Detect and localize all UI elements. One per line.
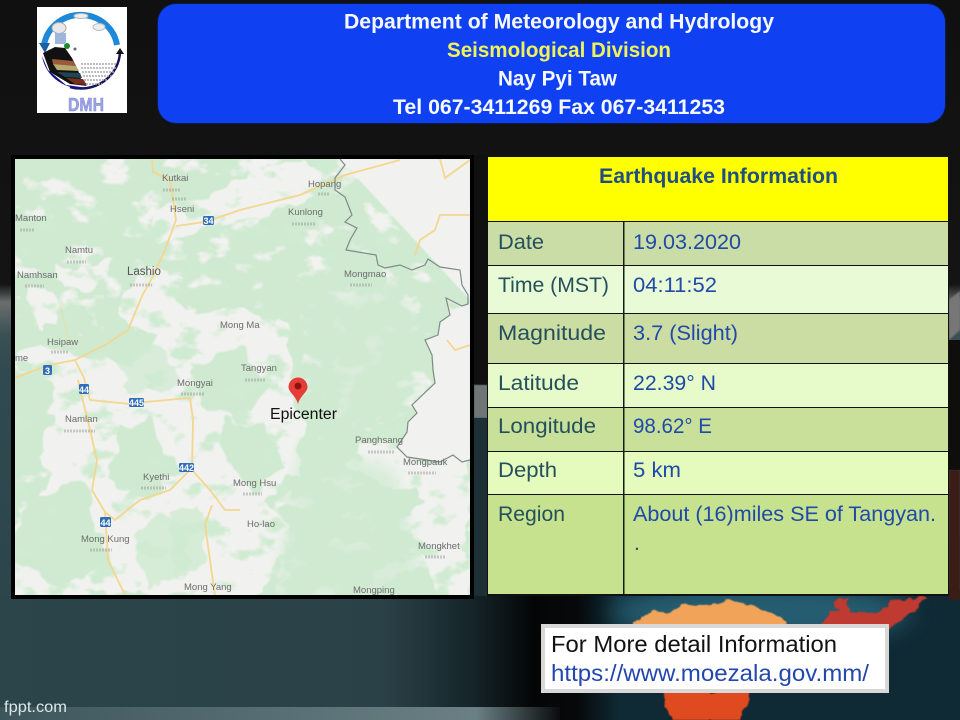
- row: date: [488, 222, 948, 265]
- map: place labels: Mong Kung: [81, 534, 130, 545]
- panel: earthquake information table: [487, 156, 949, 596]
- icon: sea and clouds: [52, 14, 117, 84]
- map: place labels: Lashio: [127, 266, 161, 278]
- map: place labels: Namlan: [65, 414, 98, 425]
- map: place labels: Ho-lao: [247, 519, 275, 530]
- map: place labels: Mongkhet: [418, 541, 460, 552]
- row: depth: [488, 452, 948, 494]
- row: longitude: [488, 408, 948, 451]
- map: route shields: 445: [129, 398, 144, 408]
- callout text: For More detail Information: [551, 631, 837, 657]
- template credit: fppt.com: [4, 699, 67, 716]
- header: contact numbers: Tel 067-3411269 Fax 067-3411253: [393, 96, 725, 119]
- row: latitude: Latitude: [498, 372, 579, 395]
- header: city: Nay Pyi Taw: [498, 68, 618, 90]
- map: place labels: [15, 173, 460, 596]
- map: place labels: Hopang: [308, 179, 341, 190]
- map: place labels: Tangyan: [241, 363, 277, 374]
- table header: Earthquake Information: [599, 165, 838, 188]
- map: forest core: [276, 292, 422, 595]
- header: division: Seismological Division: [447, 39, 671, 62]
- map: route shields: [43, 216, 214, 528]
- map: route shields: 44: [100, 518, 111, 528]
- row: longitude: 98.62° E: [633, 415, 712, 438]
- map: place labels: Mong Ma: [220, 320, 260, 331]
- header panel: [157, 3, 946, 124]
- row: depth: Depth: [498, 459, 557, 482]
- map: place labels: Namhsan: [17, 270, 58, 281]
- map: roads: [15, 159, 470, 595]
- table header: [488, 157, 948, 221]
- earth graphic: continents: [610, 582, 925, 720]
- row: time: 04:11:52: [633, 274, 717, 297]
- row: date: Date: [498, 231, 544, 254]
- epicenter label: Epicenter: [270, 406, 337, 423]
- map: place labels: Kutkai: [162, 173, 188, 184]
- map: place labels: Kyethi: [143, 472, 169, 483]
- map: place labels: Mongyai: [177, 378, 213, 389]
- map: town script marks: [20, 190, 446, 557]
- map: international border: [335, 159, 470, 462]
- map: place labels: Manton: [15, 213, 47, 224]
- map: green patches: [15, 350, 285, 590]
- logo: [37, 7, 127, 115]
- icon: water cycle arrows: [39, 15, 124, 89]
- header: department name: Department of Meteorology and Hydrology: [344, 10, 774, 34]
- row: time: Time (MST): [498, 274, 609, 297]
- panel: map: [11, 155, 474, 600]
- map: place labels: Kunlong: [288, 207, 323, 218]
- logo text: DMH: [68, 95, 104, 115]
- icon: epicenter pin: [288, 377, 308, 404]
- map: place labels: Mong Yang: [184, 582, 232, 593]
- row: region: [488, 495, 948, 594]
- row: magnitude: 3.7 (Slight): [633, 322, 738, 345]
- map: place labels: Hseni: [170, 204, 194, 215]
- map: route shields: 44: [79, 385, 89, 395]
- map: place labels: Mongmao: [344, 269, 386, 280]
- row: date: 19.03.2020: [633, 231, 741, 254]
- map: place labels: Mongpauk: [403, 457, 448, 468]
- row: magnitude: Magnitude: [498, 322, 606, 345]
- map: neighbouring territory: [340, 159, 470, 462]
- row: depth: 5 km: [633, 459, 681, 482]
- map: pale land areas: [15, 159, 470, 595]
- map: place labels: Panghsang: [355, 435, 403, 446]
- row: latitude: [488, 364, 948, 407]
- row: region: .: [634, 532, 640, 555]
- map: place labels: Mongping: [353, 585, 395, 596]
- row: region: About (16)miles SE of Tangyan.: [633, 503, 936, 526]
- row: region: Region: [498, 503, 565, 526]
- callout: more information: [541, 624, 889, 693]
- map: route shields: 34: [203, 216, 214, 226]
- row: time: [488, 266, 948, 313]
- map: place labels: Mong Hsu: [233, 478, 276, 489]
- row: longitude: Longitude: [498, 415, 596, 438]
- callout link: https://www.moezala.gov.mm/: [551, 660, 870, 686]
- map: place labels: Namtu: [65, 245, 93, 256]
- row: magnitude: [488, 314, 948, 363]
- row: latitude: 22.39° N: [633, 372, 716, 395]
- icon: hill strata: [43, 43, 87, 86]
- map: route shields: 442: [179, 463, 194, 473]
- map: route shields: 3: [45, 366, 50, 376]
- map: place labels: Hsipaw: [47, 337, 78, 348]
- map: place labels: me: [15, 353, 28, 364]
